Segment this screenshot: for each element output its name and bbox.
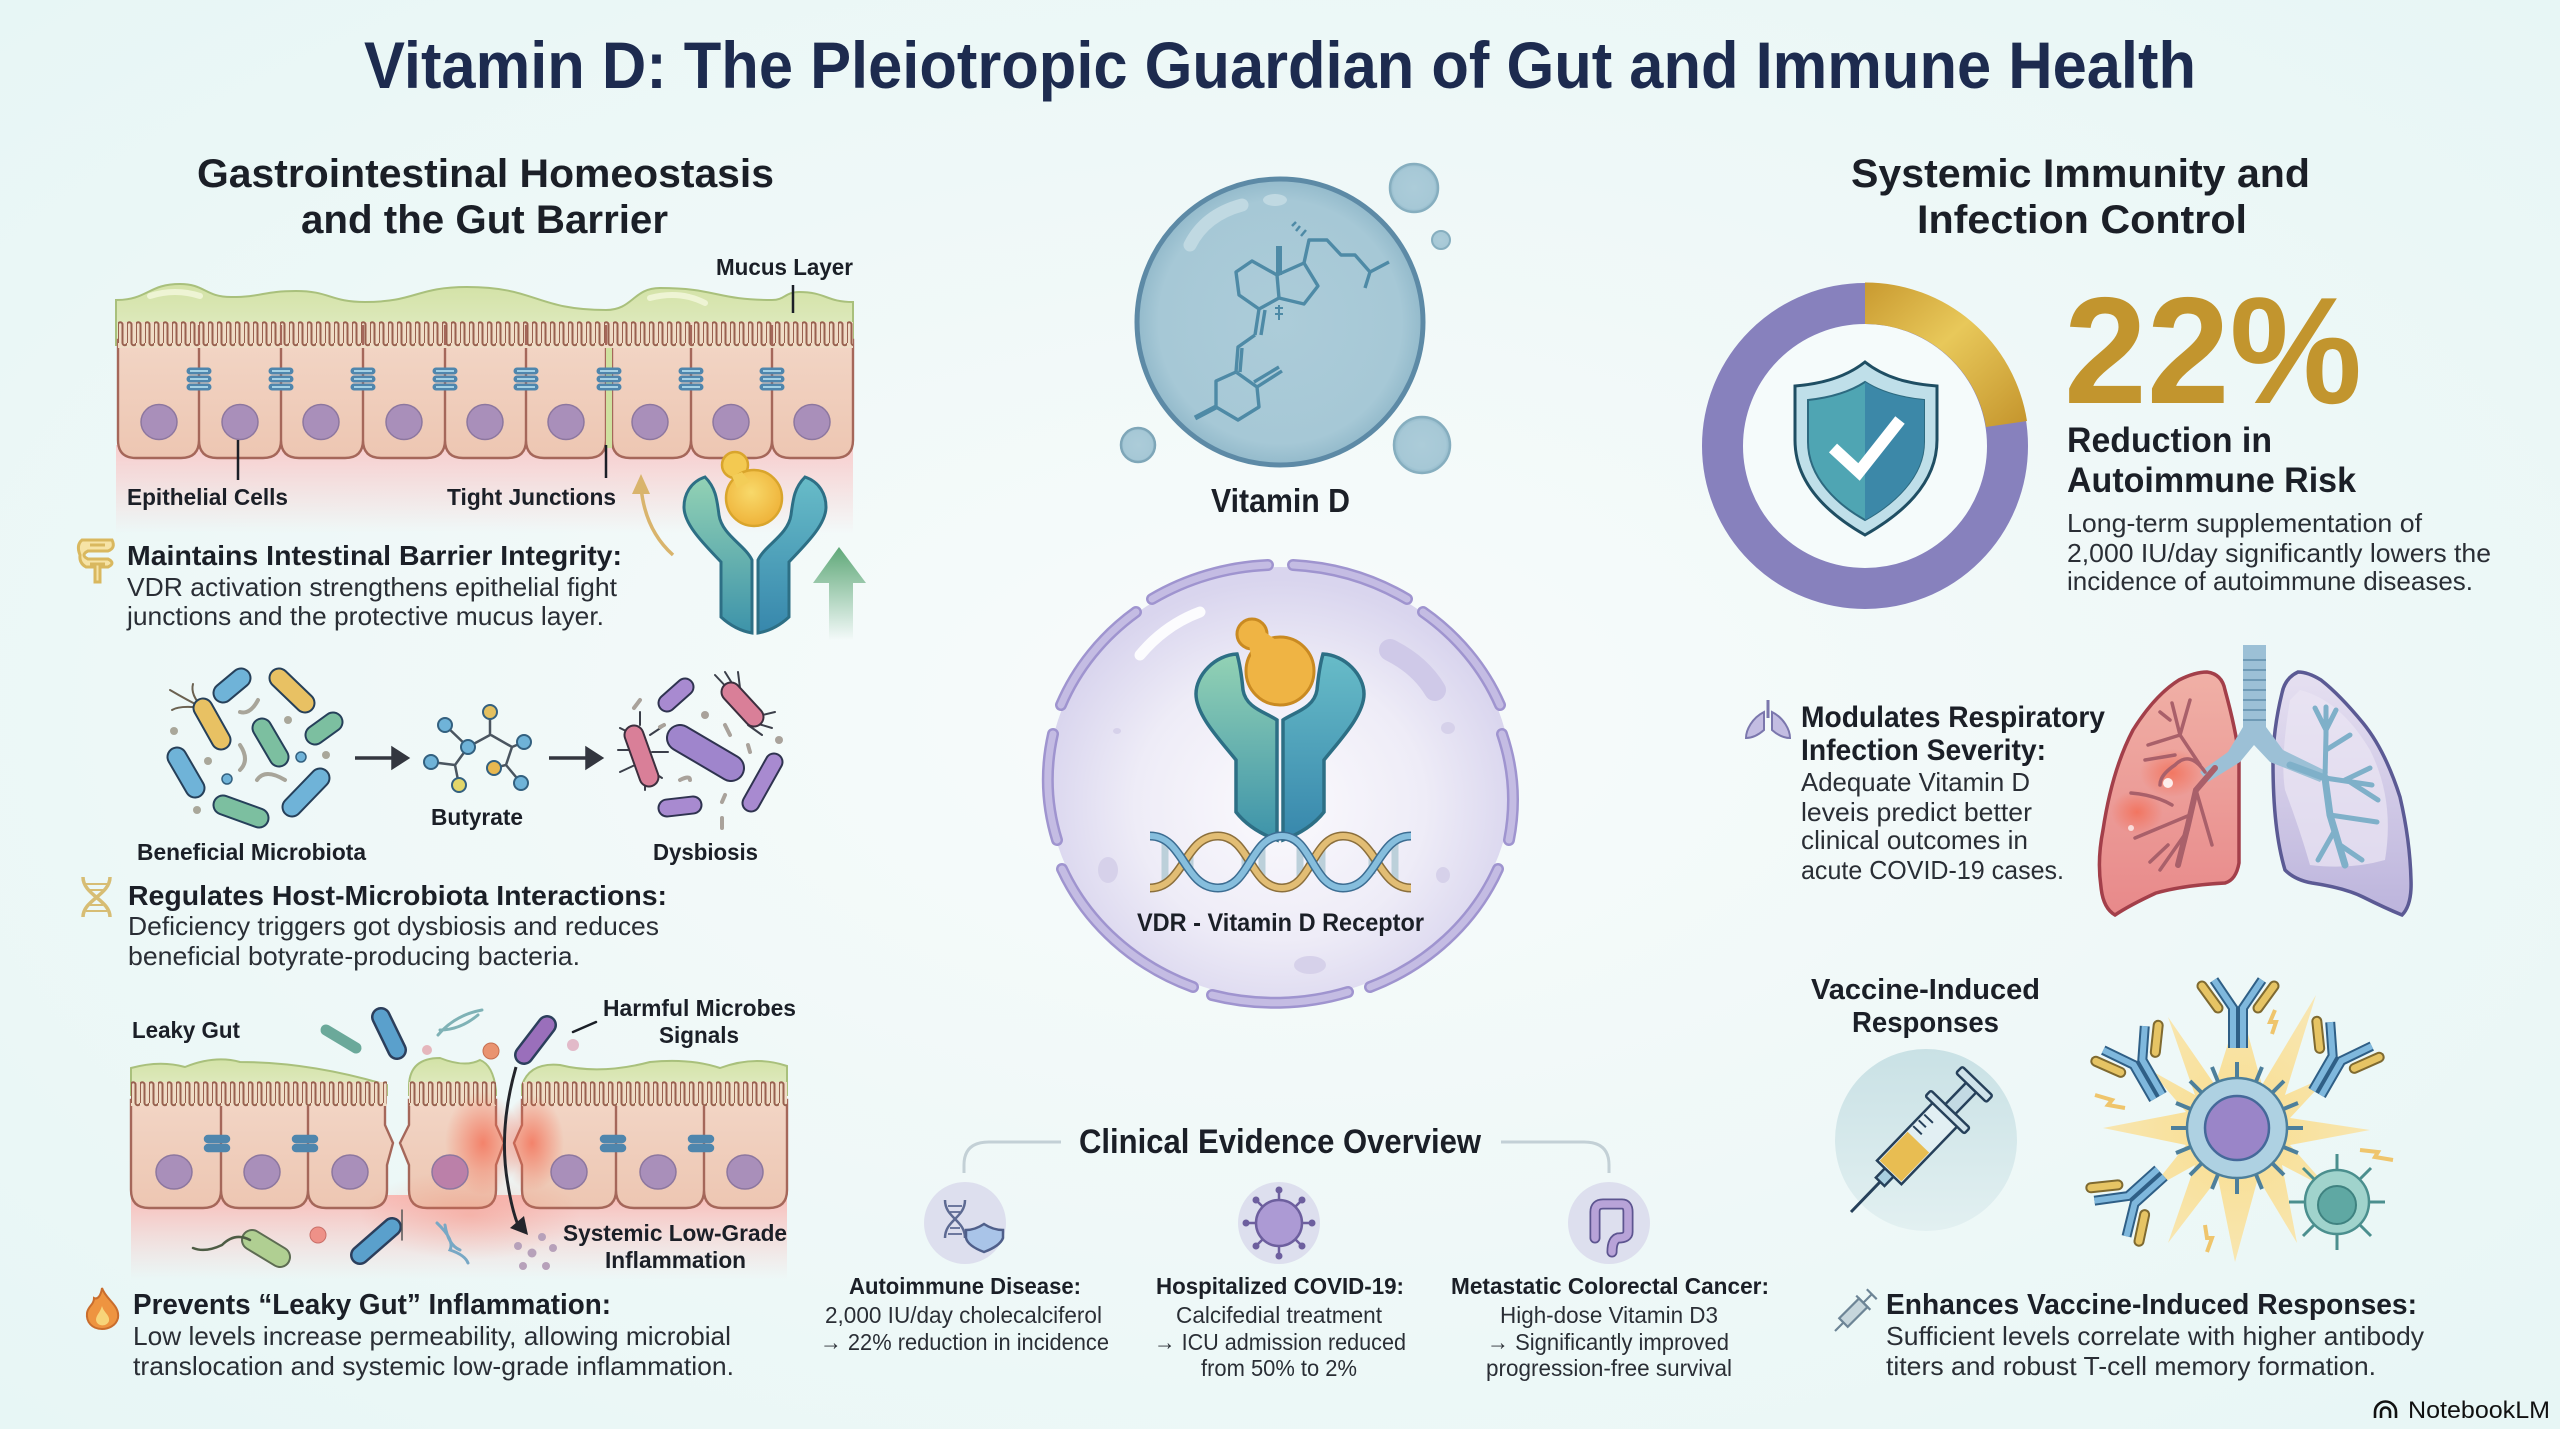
text block: reduction in autoimmune risk: Long-term supplementation of xyxy=(2067,508,2423,538)
logo: NotebookLM: NotebookLM xyxy=(2408,1397,2550,1424)
text: autoimmune disease xyxy=(820,1273,1109,1355)
panel: gastrointestinal homeostasis xyxy=(78,152,866,1381)
text: hospitalized COVID-19: → ICU admission reduced xyxy=(1154,1329,1406,1355)
text block: regulates microbiota xyxy=(128,880,667,971)
small immune cell xyxy=(2289,1154,2385,1250)
junctions xyxy=(208,1139,710,1148)
arrow: translocation xyxy=(504,1067,528,1235)
lightning sparks xyxy=(2095,1010,2393,1252)
text block: enhances vaccine responses xyxy=(1886,1289,2424,1381)
heading: systemic immunity: Infection Control xyxy=(1917,198,2247,242)
heading: systemic immunity xyxy=(1851,152,2310,242)
trachea xyxy=(2200,645,2328,782)
text block: prevents leaky gut xyxy=(133,1289,734,1381)
chart: 22% donut xyxy=(1722,282,2027,588)
arrow: to dysbiosis xyxy=(549,749,601,767)
bronchi right xyxy=(2290,707,2378,865)
text block: enhances vaccine responses: Enhances Vaccine-Induced Responses: xyxy=(1886,1289,2417,1321)
heading: vaccine-induced responses: Responses xyxy=(1852,1007,1999,1039)
heading: gut barrier xyxy=(197,152,774,242)
text block: respiratory infection: leveis predict better xyxy=(1801,797,2032,827)
icon: vitamin D bubble xyxy=(1121,164,1450,473)
label: butyrate: Butyrate xyxy=(431,804,523,830)
diagram: leaky gut xyxy=(131,995,796,1280)
tight junctions xyxy=(190,371,781,387)
label: tight junctions: Tight Junctions xyxy=(447,484,616,510)
label: vitamin D: Vitamin D xyxy=(1211,482,1350,519)
arrow: activation curve xyxy=(632,474,673,555)
text block: reduction in autoimmune risk: Reduction in xyxy=(2067,421,2272,460)
label: epithelial cells: Epithelial Cells xyxy=(127,484,288,510)
icon: shield xyxy=(1795,362,1937,535)
text block: reduction in autoimmune risk: Autoimmune Risk xyxy=(2067,461,2357,500)
text block: regulates microbiota: beneficial botyrate-producing bacteria. xyxy=(128,941,580,971)
heading: gut barrier: Gastrointestinal Homeostasis xyxy=(197,152,774,196)
text: metastatic colorectal cancer: High-dose Vitamin D3 xyxy=(1500,1302,1718,1328)
label: beneficial microbiota: Beneficial Microbiota xyxy=(137,839,366,865)
diagram: healthy gut epithelium xyxy=(116,254,853,533)
antibodies xyxy=(2086,980,2382,1245)
icon: butyrate molecule xyxy=(424,705,531,830)
cell membrane xyxy=(1048,565,1513,1003)
text block: maintains barrier: Maintains Intestinal Barrier Integrity: xyxy=(127,540,622,571)
label: systemic inflammation: Inflammation xyxy=(605,1247,746,1273)
DNA helix xyxy=(1150,836,1411,888)
illustration: immune activation xyxy=(2086,980,2393,1262)
panel: systemic immunity xyxy=(1722,152,2491,1381)
text block: maintains barrier xyxy=(126,540,622,631)
icon: colon xyxy=(1568,1182,1650,1264)
arrow: upward green xyxy=(813,547,866,640)
text: autoimmune disease: 2,000 IU/day cholecalciferol xyxy=(825,1302,1102,1328)
nuclei xyxy=(156,1155,763,1189)
receptor xyxy=(1196,619,1364,840)
text block: respiratory infection: clinical outcomes in xyxy=(1801,825,2028,855)
main immune cell xyxy=(2171,1062,2303,1194)
heading: systemic immunity: Systemic Immunity and xyxy=(1851,152,2310,196)
heading: vaccine-induced responses xyxy=(1811,974,2040,1039)
icon: VDR receptor with ligand xyxy=(684,452,826,633)
label: VDR: VDR - Vitamin D Receptor xyxy=(1137,909,1424,937)
bronchi left xyxy=(2131,700,2215,870)
text: metastatic colorectal cancer: → Significantly improved xyxy=(1487,1329,1729,1355)
text block: respiratory infection: Infection Severity: xyxy=(1801,734,2046,767)
label: leaky gut: Leaky Gut xyxy=(132,1017,240,1043)
label: harmful microbes signals: Signals xyxy=(659,1022,739,1048)
text block: prevents leaky gut: Prevents “Leaky Gut” Inflammation: xyxy=(133,1289,611,1321)
text block: reduction in autoimmune risk: incidence of autoimmune diseases. xyxy=(2067,566,2473,596)
panel: clinical evidence xyxy=(820,1123,1769,1381)
icon: flame xyxy=(87,1288,118,1329)
text block: enhances vaccine responses: Sufficient levels correlate with higher antibody xyxy=(1886,1321,2424,1351)
heading: gut barrier: and the Gut Barrier xyxy=(301,198,668,242)
icon: intestine xyxy=(78,540,113,582)
text block: respiratory infection: Modulates Respiratory xyxy=(1801,701,2105,734)
text: metastatic colorectal cancer xyxy=(1451,1273,1769,1381)
text block: regulates microbiota: Regulates Host-Microbiota Interactions: xyxy=(128,880,667,911)
text block: reduction in autoimmune risk xyxy=(2067,421,2491,596)
text: autoimmune disease: Autoimmune Disease: xyxy=(849,1273,1081,1299)
heading: vaccine-induced responses: Vaccine-Induced xyxy=(1811,974,2040,1006)
text: hospitalized COVID-19: from 50% to 2% xyxy=(1201,1355,1357,1381)
label: harmful microbes signals: Harmful Microbes xyxy=(603,995,796,1021)
text block: reduction in autoimmune risk: 2,000 IU/day significantly lowers the xyxy=(2067,538,2491,568)
text block: enhances vaccine responses: titers and robust T-cell memory formation. xyxy=(1886,1351,2376,1381)
text block: prevents leaky gut: Low levels increase permeability, allowing microbial xyxy=(133,1321,731,1351)
text block: maintains barrier: VDR activation strengthens epithelial fight xyxy=(127,572,618,602)
text block: respiratory infection: acute COVID-19 cases. xyxy=(1801,855,2064,885)
icon: dna and shield xyxy=(924,1182,1006,1264)
text block: respiratory infection: Adequate Vitamin D xyxy=(1801,767,2030,797)
icon: small syringe xyxy=(1828,1287,1879,1338)
label: systemic inflammation xyxy=(563,1220,787,1273)
text block: respiratory infection xyxy=(1801,701,2105,885)
text block: prevents leaky gut: translocation and systemic low-grade inflammation. xyxy=(133,1351,734,1381)
text: metastatic colorectal cancer: progression-free survival xyxy=(1486,1355,1732,1381)
text: hospitalized COVID-19 xyxy=(1154,1273,1406,1381)
label: mucus layer: Mucus Layer xyxy=(716,254,853,280)
text: hospitalized COVID-19: Calcifedial treatment xyxy=(1176,1302,1383,1328)
title: Vitamin D: The Pleiotropic Guardian of Gut and Immune Health xyxy=(364,28,2196,102)
text block: regulates microbiota: Deficiency triggers got dysbiosis and reduces xyxy=(128,911,659,941)
icon: virus xyxy=(1238,1182,1320,1264)
icon: syringe xyxy=(1832,1049,2017,1231)
text: autoimmune disease: → 22% reduction in incidence xyxy=(820,1329,1109,1355)
microbes above and below the barrier xyxy=(193,1010,596,1263)
stat: 22%: 22% xyxy=(2064,266,2362,436)
icon: VDR cell xyxy=(1048,565,1513,1003)
text: hospitalized COVID-19: Hospitalized COVID-19: xyxy=(1156,1273,1404,1299)
text: metastatic colorectal cancer: Metastatic Colorectal Cancer: xyxy=(1451,1273,1769,1299)
label: systemic inflammation: Systemic Low-Grade xyxy=(563,1220,787,1246)
nuclei xyxy=(141,404,830,440)
heading: clinical evidence: Clinical Evidence Overview xyxy=(1079,1123,1482,1161)
label: dysbiosis: Dysbiosis xyxy=(653,839,758,865)
arrow: to butyrate xyxy=(355,749,407,767)
illustration: lungs xyxy=(2099,645,2411,915)
diagram: dysbiosis xyxy=(618,672,783,865)
icon: small lungs xyxy=(1746,700,1790,738)
molecule xyxy=(1195,222,1389,420)
diagram: beneficial microbiota xyxy=(137,678,366,865)
label: harmful microbes signals xyxy=(603,995,796,1048)
icon: DNA xyxy=(83,877,110,917)
text block: maintains barrier: junctions and the protective mucus layer. xyxy=(126,601,604,631)
panel: center xyxy=(820,164,1769,1381)
